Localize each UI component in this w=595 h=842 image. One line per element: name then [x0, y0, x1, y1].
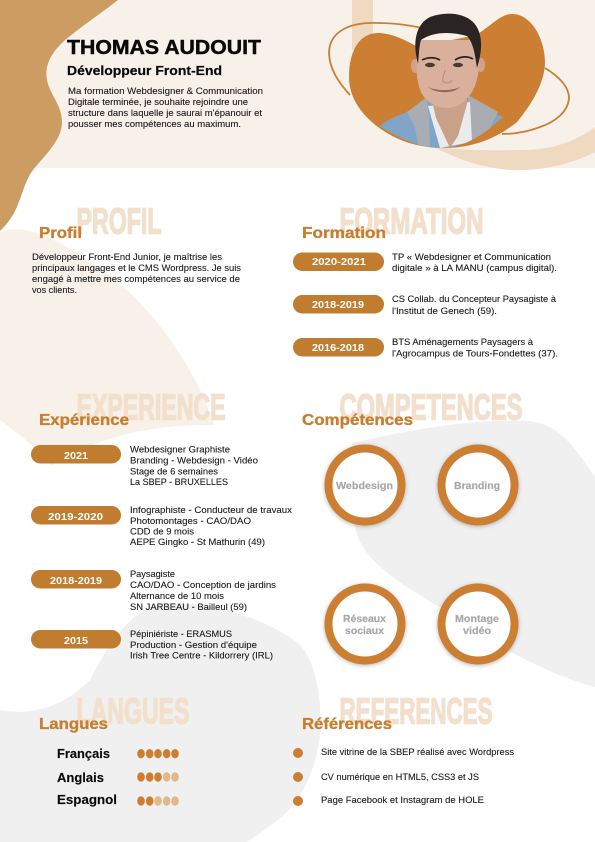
profile text: [32, 252, 242, 295]
skill: branding: [442, 448, 514, 522]
experience entry 2019-2020: [31, 505, 293, 547]
skill: reseaux sociaux: [328, 588, 402, 660]
orange blob: [349, 14, 545, 148]
face: [416, 40, 479, 108]
ghost heading: EXPERIENCE: [76, 386, 226, 428]
job title: Développeur Front-End: [67, 64, 222, 78]
header text: [67, 37, 263, 129]
portrait with blob: [329, 14, 569, 150]
experience entry 2021: La SBEP - BRUXELLES: [130, 477, 228, 487]
section: profil: [32, 200, 242, 295]
skill: montage video: Montage: [455, 614, 499, 625]
experience entry 2018-2019: Paysagiste: [130, 569, 175, 579]
experience entry 2021: [31, 444, 258, 487]
language: francais: [57, 747, 179, 761]
experience entry 2019-2020: Photomontages - CAO/DAO: [130, 516, 251, 526]
intro paragraph: pousser mes compétences au maximum.: [68, 119, 241, 129]
language: anglais: Anglais: [57, 771, 104, 785]
formation entry 3: [293, 337, 558, 358]
heading: Profil: [39, 225, 82, 242]
language: espagnol: Espagnol: [57, 793, 117, 807]
section: references: [293, 690, 515, 806]
ghost heading: REFERENCES: [340, 690, 492, 732]
section: experience: [31, 386, 293, 660]
orange outline ring: [329, 23, 569, 134]
ghost heading: LANGUES: [76, 690, 190, 732]
profile text: principaux langages et le CMS Wordpress. Je suis: [32, 263, 242, 273]
formation entry 1: digitale » à LA MANU (campus digital).: [392, 263, 557, 273]
skill: branding: Branding: [454, 481, 500, 492]
reference 1: Site vitrine de la SBEP réalisé avec Wordpress: [321, 747, 515, 757]
formation entry 2: [293, 294, 556, 316]
formation entry 2: l'Institut de Genech (59).: [392, 306, 497, 316]
heading: Expérience: [39, 412, 129, 429]
jacket: [380, 100, 504, 148]
experience entry 2019-2020: AEPE Gingko - St Mathurin (49): [130, 537, 265, 547]
formation entry 3: 2016-2018: [312, 343, 364, 354]
experience entry 2015: Irish Tree Centre - Kildorrery (IRL): [130, 650, 273, 660]
shirt: [428, 102, 472, 148]
photo of Thomas: [380, 14, 504, 148]
experience entry 2018-2019: 2018-2019: [50, 576, 102, 587]
experience entry 2015: 2015: [64, 636, 88, 647]
experience entry 2018-2019: [31, 569, 277, 612]
skill: reseaux sociaux: Réseaux: [343, 614, 386, 625]
experience entry 2021: Webdesigner Graphiste: [130, 444, 230, 454]
formation entry 1: TP « Webdesigner et Communication: [392, 252, 551, 262]
experience entry 2021: 2021: [64, 451, 88, 462]
experience entry 2021: Stage de 6 semaines: [130, 466, 219, 476]
formation entry 3: l'Agrocampus de Tours-Fondettes (37).: [392, 348, 558, 358]
section: competences: [302, 386, 522, 660]
neck: [432, 98, 467, 148]
formation entry 1: 2020-2021: [312, 257, 366, 268]
reference 2: CV numérique en HTML5, CSS3 et JS: [321, 772, 479, 782]
experience entry 2015: [31, 629, 273, 660]
experience entry 2015: Production - Gestion d'équipe: [130, 640, 257, 650]
heading: Langues: [39, 716, 108, 733]
skill: webdesign: Webdesign: [336, 481, 393, 492]
formation entry 3: BTS Aménagements Paysagers à: [392, 337, 533, 347]
intro paragraph: Ma formation Webdesigner & Communication: [68, 86, 263, 96]
profile text: Développeur Front-End Junior, je maîtrise les: [32, 252, 223, 262]
heading: Formation: [302, 225, 386, 242]
experience entry 2019-2020: CDD de 9 mois: [130, 526, 195, 536]
experience entry 2018-2019: SN JARBEAU - Bailleul (59): [130, 602, 247, 612]
skill: montage video: [442, 588, 514, 660]
hoodie: [407, 95, 498, 148]
section: formation: [293, 200, 558, 358]
language: anglais: [57, 771, 179, 785]
formation entry 1: [293, 252, 557, 273]
mouth: [428, 87, 460, 92]
nose: [443, 70, 452, 83]
ears: [411, 59, 417, 73]
profile text: engagé à mettre mes compétences au service de: [32, 274, 240, 284]
formation entry 2: 2018-2019: [312, 300, 364, 311]
profile text: vos clients.: [32, 285, 77, 295]
language: espagnol: [57, 793, 179, 807]
intro paragraph: Digitale terminée, je souhaite rejoindre une: [68, 97, 248, 107]
hair: [415, 14, 481, 68]
reference 3: Page Facebook et Instagram de HOLE: [321, 795, 484, 805]
experience entry 2019-2020: Infographiste - Conducteur de travaux: [130, 505, 293, 515]
experience entry 2018-2019: CAO/DAO - Conception de jardins: [130, 580, 277, 590]
intro paragraph: structure dans laquelle je saurai m'épanouir et: [68, 108, 263, 118]
brows: [422, 57, 473, 60]
ghost heading: PROFIL: [76, 200, 162, 242]
experience entry 2015: Pépiniériste - ERASMUS: [130, 629, 232, 639]
language: francais: Français: [57, 747, 110, 761]
experience entry 2021: Branding - Webdesign - Vidéo: [130, 456, 258, 466]
ghost heading: FORMATION: [340, 200, 484, 242]
experience entry 2018-2019: Alternance de 10 mois: [130, 591, 225, 601]
intro paragraph: [68, 86, 263, 129]
heading: Références: [302, 716, 392, 733]
name: THOMAS AUDOUIT: [67, 37, 261, 59]
heading: Compétences: [302, 412, 413, 429]
experience entry 2019-2020: 2019-2020: [48, 512, 103, 523]
eyes: [425, 63, 435, 67]
formation entry 2: CS Collab. du Concepteur Paysagiste à: [392, 294, 556, 304]
section: langues: [39, 690, 190, 807]
skill: montage video: vidéo: [463, 626, 491, 637]
skill: reseaux sociaux: sociaux: [345, 626, 384, 637]
skill: webdesign: [328, 448, 402, 522]
